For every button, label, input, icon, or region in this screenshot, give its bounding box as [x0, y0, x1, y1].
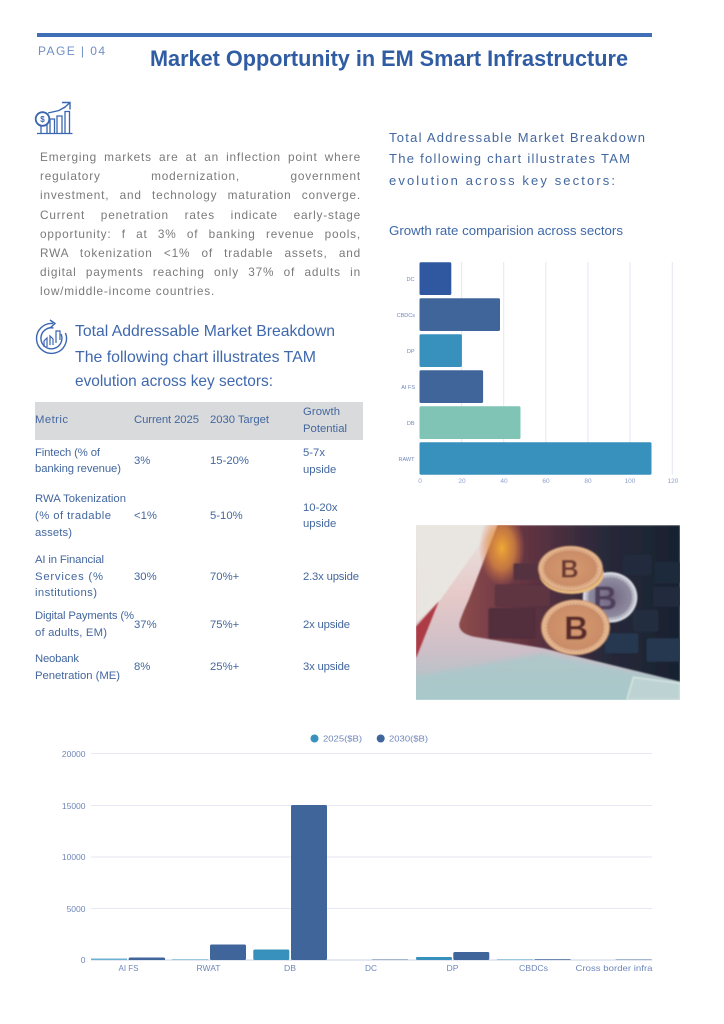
row: RWA tokenization: assets) — [35, 527, 72, 539]
value axis: 40 — [500, 478, 508, 485]
body text: opportunity: f at 3% of banking revenue pools, — [40, 227, 361, 241]
row: neobank penetration — [35, 653, 350, 682]
row: AI in financial services: 30% — [134, 571, 157, 583]
value axis: 20 — [458, 478, 466, 485]
row: neobank penetration: 8% — [134, 661, 150, 673]
right heading: Total Addressable Market Breakdown — [389, 130, 645, 145]
row: RWA tokenization: <1% — [134, 510, 157, 522]
row: fintech: 3% — [134, 455, 150, 467]
bars — [420, 262, 652, 475]
left heading: The following chart illustrates TAM — [75, 349, 316, 366]
column chart: TAM 2025 vs 2030 — [62, 734, 653, 973]
category labels — [397, 277, 415, 463]
category labels: CBDCs — [397, 313, 415, 319]
value axis: 100 — [625, 478, 636, 485]
body text: Emerging markets are at an inflection point where — [40, 150, 361, 164]
row: RWA tokenization: 5-10% — [210, 510, 243, 522]
value axis: 0 — [418, 478, 422, 485]
row: fintech: Fintech (% of — [35, 447, 101, 459]
row: digital payments: of adults, EM) — [35, 627, 107, 639]
value axis: 120 — [668, 478, 679, 485]
row: RWA tokenization — [35, 493, 338, 539]
category labels: DP — [407, 349, 415, 355]
row: RWA tokenization: 10-20x — [303, 502, 338, 514]
page number: PAGE | 04 — [38, 44, 105, 58]
left heading: Total Addressable Market Breakdown — [75, 323, 335, 340]
right heading: The following chart illustrates TAM — [389, 151, 630, 166]
table header: Metric — [35, 414, 68, 426]
bar chart: growth rate by sector — [397, 262, 679, 485]
category labels: CBDCs — [519, 963, 548, 973]
left heading — [75, 323, 335, 390]
row: fintech: banking revenue) — [35, 463, 121, 475]
body text — [40, 150, 361, 298]
row: AI in financial services: Services (% — [35, 571, 103, 583]
y axis labels: 10000 — [62, 852, 86, 862]
row: AI in financial services: AI in Financial — [35, 554, 104, 566]
value axis — [418, 478, 679, 485]
category labels: DC — [407, 277, 415, 283]
body text: digital payments reaching only 37% of adults in — [40, 265, 361, 279]
row: digital payments: 75%+ — [210, 619, 240, 631]
columns — [91, 805, 652, 960]
category labels: AI FS — [118, 963, 139, 973]
title: Market Opportunity in EM Smart Infrastructure — [150, 46, 628, 71]
right heading — [389, 130, 645, 188]
coins: B — [593, 580, 617, 617]
body text: RWA tokenization <1% of tradable assets, and — [40, 246, 361, 260]
legend — [310, 734, 428, 744]
row: fintech: 5-7x — [303, 447, 325, 459]
y axis labels: 15000 — [62, 801, 86, 811]
table header — [35, 402, 363, 440]
row: neobank penetration: Neobank — [35, 653, 79, 665]
category labels — [118, 963, 653, 973]
trackpad edge — [627, 677, 680, 700]
legend: 2030($B) — [389, 734, 428, 744]
category labels: RWAT — [196, 963, 220, 973]
row: neobank penetration: 25%+ — [210, 661, 240, 673]
row: RWA tokenization: RWA Tokenization — [35, 493, 126, 505]
row: AI in financial services: 2.3x upside — [303, 571, 359, 583]
row: fintech: 15-20% — [210, 455, 249, 467]
row: neobank penetration: Penetration (ME) — [35, 670, 120, 682]
table header: 2030 Target — [210, 414, 270, 426]
left heading: evolution across key sectors: — [75, 373, 273, 390]
row: AI in financial services: 70%+ — [210, 571, 240, 583]
photo: bitcoins on laptop keyboard — [416, 525, 680, 700]
category labels: AI FS — [401, 385, 415, 391]
row: fintech: upside — [303, 464, 336, 476]
body text: low/middle-income countries. — [40, 284, 215, 298]
y axis labels — [62, 749, 86, 965]
row: RWA tokenization: (% of tradable — [35, 510, 111, 522]
category labels: RAWT — [398, 457, 415, 463]
coins: B — [564, 610, 588, 647]
table header: Potential — [303, 423, 347, 435]
bar chart heading: Growth rate comparision across sectors — [389, 223, 624, 238]
value axis: 60 — [542, 478, 550, 485]
row: AI in financial services — [35, 554, 359, 599]
row: neobank penetration: 3x upside — [303, 661, 350, 673]
body text: regulatory modernization, government — [40, 169, 361, 183]
table header: Growth — [303, 406, 340, 418]
coins: B — [560, 555, 579, 583]
icon: growth chart with coin — [36, 102, 72, 134]
y axis labels: 20000 — [62, 749, 86, 759]
row: digital payments: Digital Payments (% — [35, 610, 134, 622]
category labels: DC — [365, 963, 377, 973]
legend: 2025($B) — [323, 734, 362, 744]
icon: growth chart with coin: $ — [40, 115, 45, 124]
row: digital payments: 37% — [134, 619, 157, 631]
y axis labels: 0 — [81, 955, 86, 965]
category labels: Cross border infra — [576, 963, 653, 973]
row: digital payments — [35, 610, 350, 639]
row: digital payments: 2x upside — [303, 619, 350, 631]
keyboard keys — [489, 555, 680, 662]
table header: Current 2025 — [134, 414, 199, 426]
category labels: DB — [407, 421, 415, 427]
icon: circular growth arrow — [37, 320, 67, 353]
body text: investment, and technology maturation converge. — [40, 188, 361, 202]
row: fintech — [35, 447, 336, 476]
coins — [538, 546, 637, 655]
row: RWA tokenization: upside — [303, 518, 336, 530]
body text: Current penetration rates indicate early-stage — [40, 208, 361, 222]
category labels: DB — [284, 963, 296, 973]
top rule — [37, 33, 652, 37]
table — [35, 402, 363, 682]
value axis: 80 — [584, 478, 592, 485]
category labels: DP — [446, 963, 459, 973]
y axis labels: 5000 — [67, 904, 86, 914]
row: AI in financial services: institutions) — [35, 587, 97, 599]
right heading: evolution across key sectors: — [389, 173, 615, 188]
